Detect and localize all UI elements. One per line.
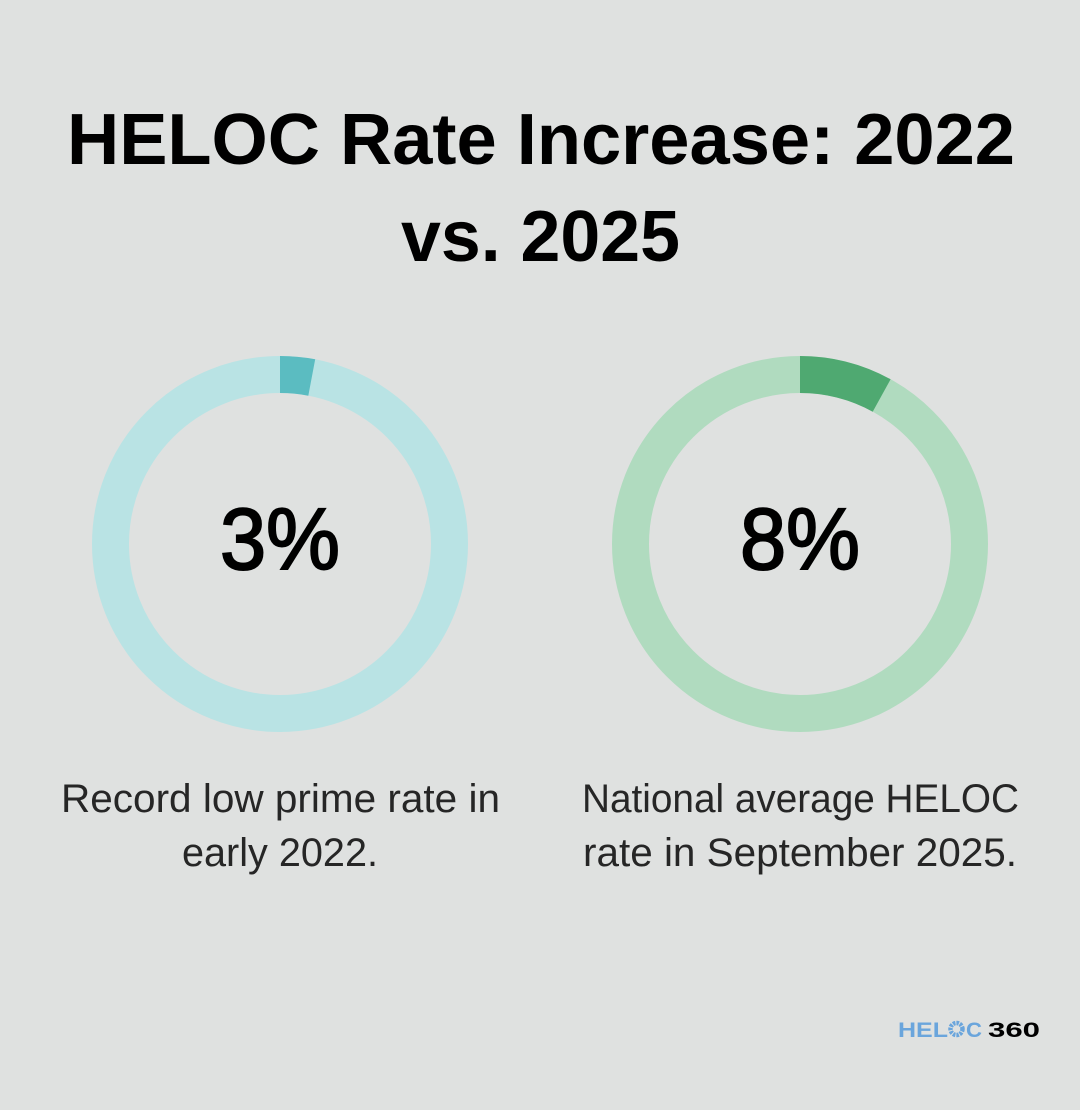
panel: 8% donut chart xyxy=(630,356,970,714)
panel: 8% donut chart: 8% xyxy=(740,491,860,588)
logo: HELOC360: C xyxy=(966,1019,982,1042)
text block: 3% caption xyxy=(61,777,500,875)
panel: 3% donut chart: 3% xyxy=(220,491,340,588)
title: vs. 2025 xyxy=(401,197,680,277)
text block: 3% caption: Record low prime rate in xyxy=(61,777,500,821)
text block: 8% caption xyxy=(582,777,1019,875)
text block: 8% caption: rate in September 2025. xyxy=(583,831,1017,875)
logo: HELOC360 xyxy=(898,1019,1040,1042)
text block: 3% caption: early 2022. xyxy=(182,831,378,875)
panel: 3% donut chart xyxy=(110,356,450,714)
logo: HELOC360: HEL xyxy=(898,1019,948,1042)
logo: HELOC360: 360 xyxy=(988,1019,1040,1042)
title xyxy=(67,100,1015,277)
text block: 8% caption: National average HELOC xyxy=(582,777,1019,821)
title: HELOC Rate Increase: 2022 xyxy=(67,100,1015,180)
